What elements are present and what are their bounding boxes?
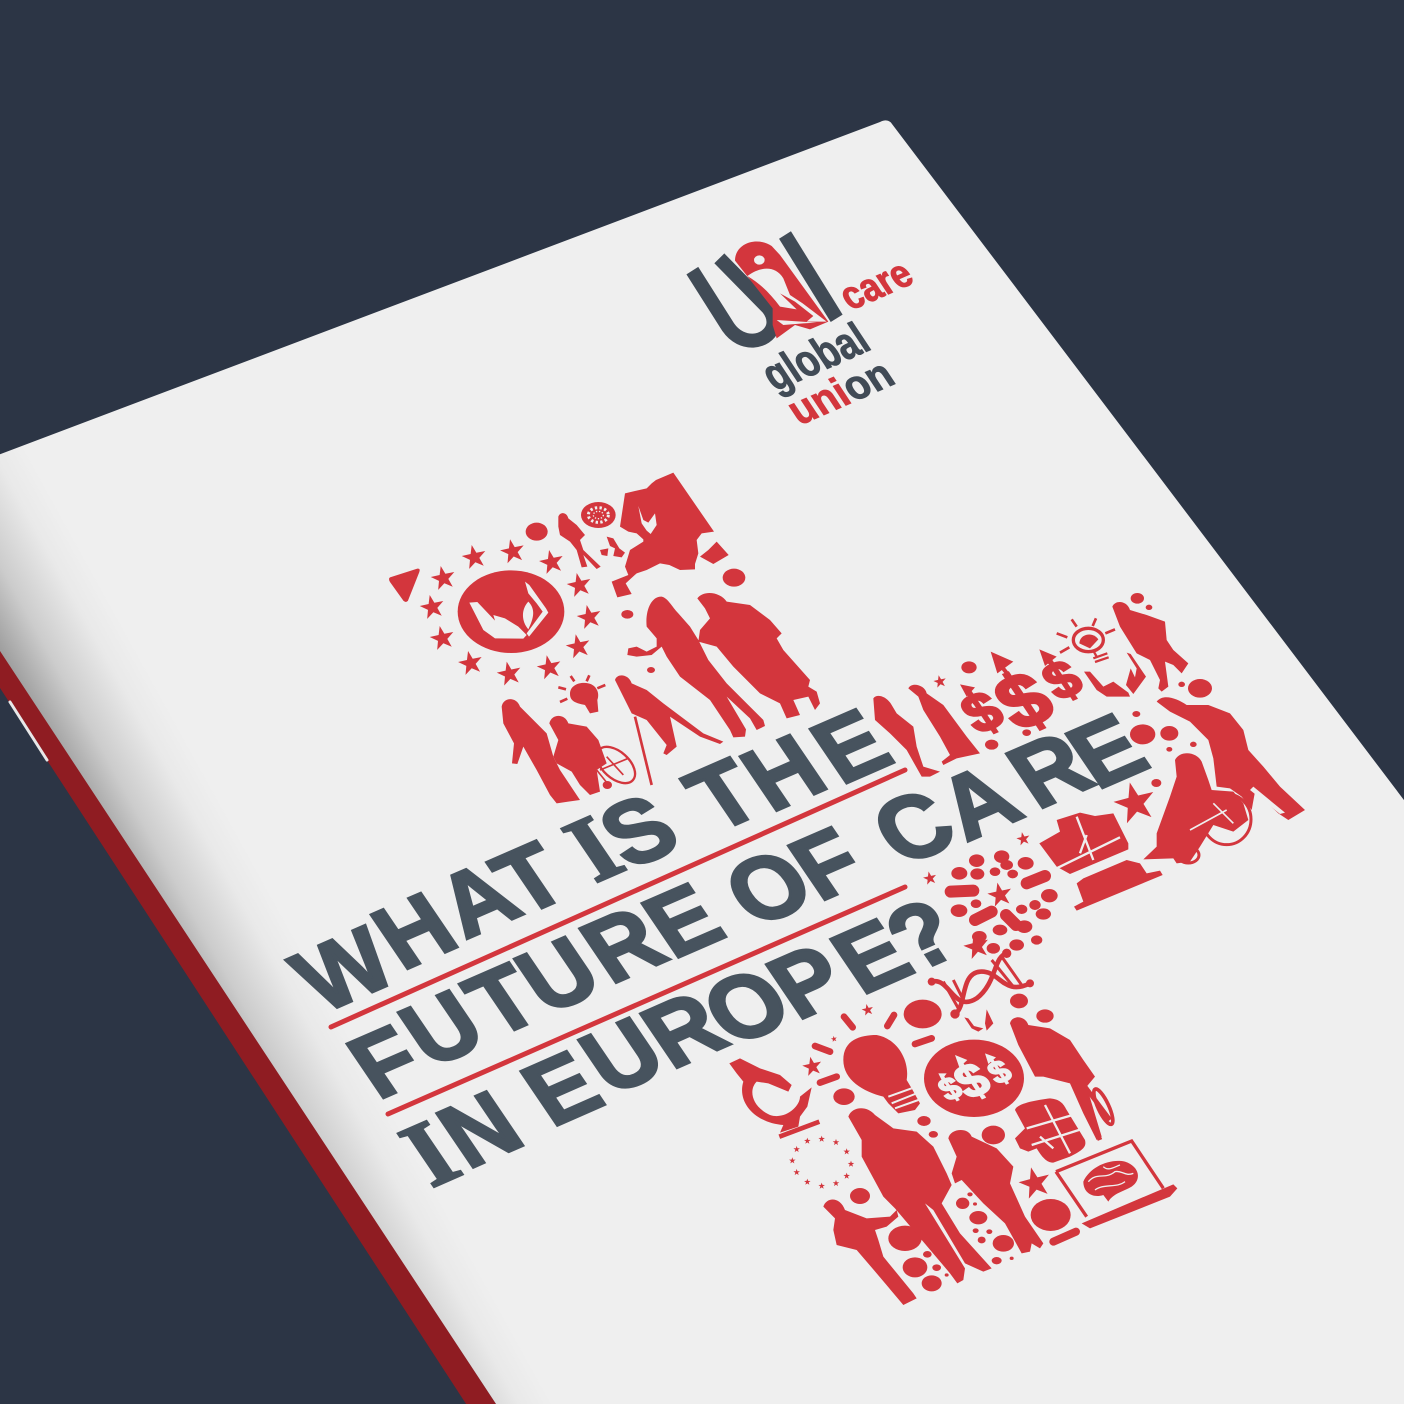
booklet spine bbox=[0, 648, 500, 1404]
icon: big light bulb bbox=[801, 1003, 932, 1113]
circle of stars bbox=[418, 537, 603, 687]
standing figures bbox=[873, 685, 980, 777]
icon: laptop base bbox=[1074, 860, 1163, 911]
logo text global: global bbox=[751, 313, 879, 400]
icon: laptop with brain bbox=[1056, 1141, 1177, 1228]
logo text union: union bbox=[778, 351, 903, 434]
large dots bbox=[833, 994, 1071, 1291]
dot pattern bbox=[951, 850, 1058, 954]
icon: dollar disc: $ bbox=[944, 1052, 1000, 1109]
icon: dollar disc: $ bbox=[981, 1053, 1019, 1092]
icon: microscope bbox=[729, 1058, 819, 1137]
icon: DNA helix bbox=[928, 949, 1034, 1019]
carer with wheelchair user bbox=[502, 699, 642, 803]
logo text care: care bbox=[830, 250, 921, 318]
icon: patterned disc bbox=[581, 502, 616, 528]
logo bbox=[692, 235, 921, 434]
icon: cyclist bbox=[558, 513, 601, 569]
scattered dots bbox=[922, 593, 1212, 908]
logo letter U bbox=[692, 258, 774, 341]
ring of small stars bbox=[789, 1136, 854, 1189]
top arm of the cross bbox=[389, 473, 820, 803]
icon: brain light bulb bbox=[1057, 618, 1115, 662]
title line 2: FUTURE OF CARE bbox=[322, 681, 1165, 1119]
icon: dollar disc: $ bbox=[932, 1070, 969, 1108]
decorative dots bbox=[526, 523, 745, 673]
rising dollar symbols bbox=[949, 648, 1093, 746]
carer pushing wheelchair bbox=[1143, 697, 1305, 863]
star above DNA bbox=[961, 931, 992, 960]
logo letter I bbox=[785, 235, 837, 318]
red rule 1 bbox=[331, 770, 905, 1027]
map of Europe bbox=[600, 473, 729, 597]
walking person bbox=[1112, 602, 1188, 692]
icon: triangle bbox=[389, 569, 420, 602]
rising dollar symbols: $ bbox=[1031, 648, 1093, 711]
star beside laptop bbox=[1016, 1164, 1053, 1200]
rising dollar symbols: $ bbox=[979, 654, 1068, 746]
icon: dollar disc bbox=[924, 1040, 1024, 1117]
icon: second suitcase bbox=[1015, 1098, 1085, 1163]
bottom arm of the cross bbox=[729, 931, 1177, 1305]
title line 3: IN EUROPE? bbox=[376, 871, 979, 1205]
rising dollar symbols: $ bbox=[949, 679, 1015, 746]
women walking arm in arm bbox=[627, 593, 820, 737]
icon: caring hands disc bbox=[458, 570, 564, 653]
logo red figure bbox=[735, 241, 828, 338]
icon: light bulb bbox=[558, 675, 605, 713]
logo white figure bbox=[747, 255, 827, 325]
icon: suitcase bbox=[1039, 813, 1128, 874]
icon: hands bbox=[1084, 653, 1146, 697]
icon: small hands bbox=[964, 1009, 993, 1032]
title bbox=[267, 681, 1165, 1205]
cyclist bbox=[1010, 1017, 1116, 1140]
family silhouettes bbox=[823, 1108, 1043, 1305]
right arm of the cross bbox=[873, 593, 1305, 954]
red rule 2 bbox=[388, 887, 905, 1114]
person on crutches bbox=[615, 675, 723, 785]
staple bbox=[10, 702, 47, 760]
capsule bbox=[1053, 1232, 1076, 1242]
title line 1: WHAT IS THE bbox=[267, 681, 910, 1031]
